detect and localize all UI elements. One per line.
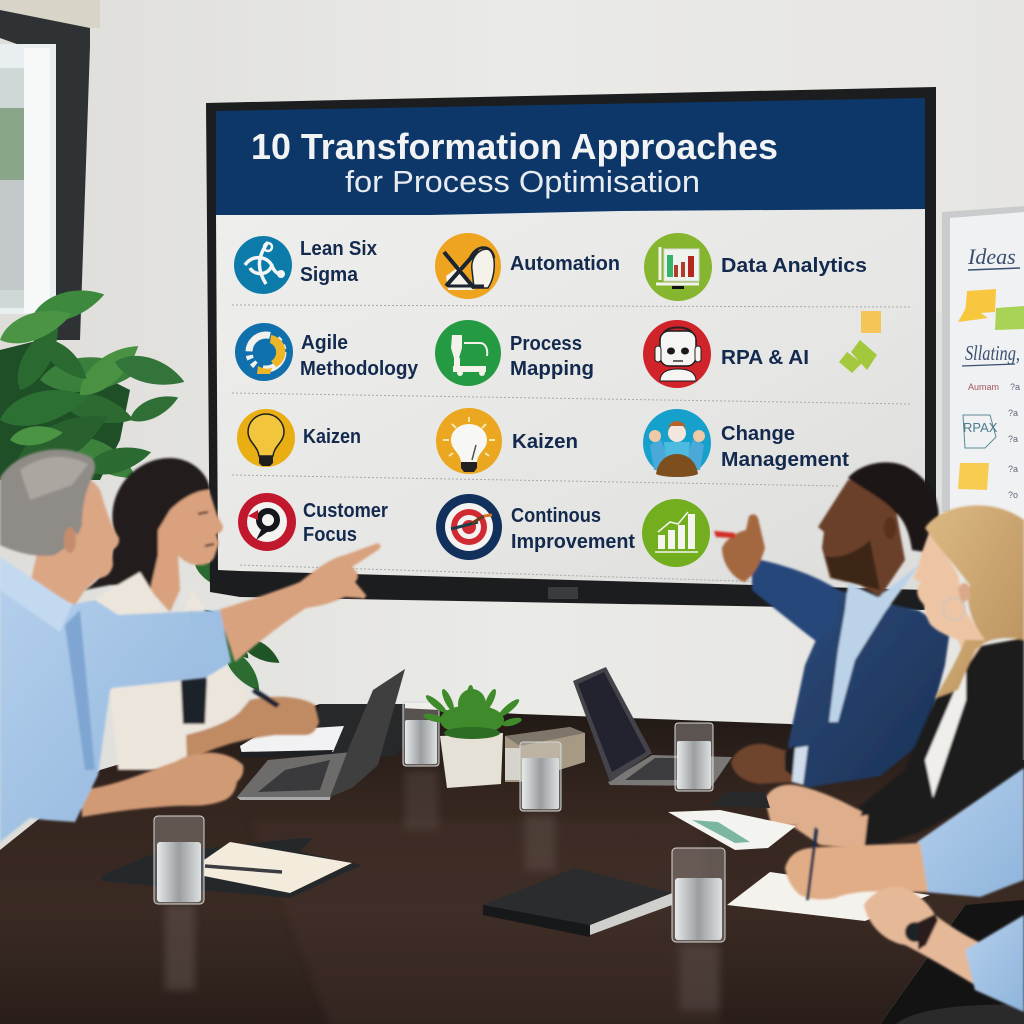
hair bbox=[925, 505, 1024, 698]
woman with dark hair bbox=[84, 458, 319, 770]
watch and cuff bbox=[785, 745, 795, 778]
tablet on table bbox=[300, 704, 405, 756]
label: process mapping: Process bbox=[510, 333, 582, 355]
hair bbox=[84, 458, 210, 590]
label: lean six sigma: Lean Six bbox=[300, 238, 377, 260]
label: continuous improvement: Continous bbox=[511, 505, 601, 527]
whiteboard: ?a bbox=[1010, 382, 1020, 392]
whiteboard: RPAX bbox=[963, 420, 998, 435]
glass front left bbox=[154, 816, 204, 904]
potted plant behind people bbox=[0, 281, 284, 696]
neck and face bbox=[30, 479, 119, 605]
white content panel bbox=[216, 208, 925, 590]
beard shade bbox=[825, 540, 880, 590]
hair bbox=[0, 449, 95, 556]
blue header band bbox=[216, 98, 925, 215]
back notepad spine bbox=[240, 750, 333, 758]
conference table bbox=[0, 704, 1024, 1024]
man with grey hair bbox=[0, 449, 380, 842]
ear bbox=[64, 527, 76, 553]
label: customer focus: Customer bbox=[303, 500, 388, 522]
icon: rpa and ai robot bbox=[643, 320, 711, 388]
whiteboard bbox=[934, 206, 1024, 520]
marker bbox=[714, 531, 735, 538]
label: lean six sigma bbox=[300, 238, 377, 286]
face and neck bbox=[913, 530, 985, 665]
icon: kaizen bulb with rays bbox=[436, 408, 502, 474]
small tablet bbox=[710, 792, 770, 808]
label: continuous improvement: Improvement bbox=[511, 531, 635, 553]
title: 10 Transformation Approaches bbox=[251, 126, 778, 167]
label: kaizen centre: Kaizen bbox=[512, 431, 578, 453]
dark top bbox=[178, 612, 207, 724]
man in navy suit bbox=[714, 462, 950, 788]
label: agile methodology: Methodology bbox=[300, 358, 419, 380]
icon: process mapping bbox=[435, 320, 501, 386]
label: process mapping: Mapping bbox=[510, 358, 594, 380]
icon: automation bbox=[435, 233, 501, 299]
beige box bbox=[505, 727, 585, 782]
whiteboard: ?a bbox=[1008, 464, 1018, 474]
wall display frame bbox=[206, 87, 936, 610]
row dividers bbox=[232, 305, 910, 582]
label: agile methodology bbox=[300, 332, 419, 380]
table reflections bbox=[165, 770, 720, 1024]
label: change management bbox=[721, 423, 849, 471]
whiteboard: ?a bbox=[1008, 408, 1018, 418]
icon: agile methodology bbox=[235, 323, 293, 381]
glass back right bbox=[675, 723, 713, 791]
label: agile methodology: Agile bbox=[301, 332, 348, 354]
label: automation: Automation bbox=[510, 253, 620, 275]
paper on table bbox=[668, 810, 796, 850]
resting hand bbox=[731, 744, 793, 784]
glass front right bbox=[672, 848, 725, 942]
back notepad bbox=[240, 726, 344, 754]
suit body bbox=[788, 590, 950, 788]
glass centre bbox=[520, 742, 561, 811]
frame bracket bbox=[548, 587, 578, 599]
cuff bbox=[190, 610, 231, 678]
person in blue shirt at right bbox=[785, 768, 1024, 1012]
label: continuous improvement bbox=[511, 505, 635, 553]
glass back left bbox=[403, 702, 439, 766]
laptop left bbox=[237, 669, 405, 800]
label: lean six sigma: Sigma bbox=[300, 264, 359, 286]
sticky notes on screen bbox=[839, 311, 881, 373]
lower arm and hand bbox=[864, 887, 1000, 985]
blonde woman bbox=[765, 505, 1024, 850]
window bbox=[0, 0, 100, 340]
raised hand bbox=[722, 514, 765, 582]
label: change management: Change bbox=[721, 423, 795, 445]
display screen bbox=[216, 98, 925, 590]
collar bbox=[0, 557, 72, 632]
arm and hands bbox=[186, 697, 319, 762]
shirt bbox=[829, 563, 921, 722]
icon: customer focus target bbox=[238, 493, 296, 551]
chart on paper bbox=[692, 820, 750, 843]
upper sleeve bbox=[917, 768, 1024, 897]
label: process mapping bbox=[510, 333, 594, 380]
face and neck bbox=[150, 490, 223, 612]
left folder with notepad bbox=[102, 838, 362, 898]
raised sleeve bbox=[752, 558, 838, 642]
spiral notebook right bbox=[727, 872, 930, 921]
whiteboard: Ideas bbox=[967, 244, 1016, 269]
lower forearm and fist bbox=[82, 753, 243, 817]
dark floor right of table bbox=[880, 900, 1024, 1024]
subtitle: for Process Optimisation bbox=[345, 164, 700, 199]
icon: growth chart bbox=[642, 499, 710, 567]
hair bbox=[848, 462, 939, 552]
lower sleeve bbox=[965, 915, 1024, 1012]
ear bbox=[884, 517, 896, 539]
neck and head bbox=[818, 480, 905, 597]
hoop earring bbox=[943, 598, 965, 620]
icon: continuous improvement bullseye bbox=[436, 494, 502, 560]
pen bbox=[806, 827, 818, 900]
blazer bbox=[92, 572, 250, 770]
icon: kaizen bulb bbox=[237, 409, 295, 467]
hands bbox=[765, 785, 862, 828]
pointing arm bbox=[218, 543, 380, 662]
black blazer bbox=[853, 638, 1024, 850]
label: change management: Management bbox=[721, 449, 849, 471]
upper arm and hand bbox=[785, 843, 928, 899]
ear bbox=[958, 583, 970, 604]
chair back bbox=[896, 1005, 1024, 1024]
white blouse bbox=[925, 664, 966, 798]
icon: lean six sigma bbox=[234, 236, 292, 294]
label: customer focus bbox=[303, 500, 388, 546]
label: rpa and ai: RPA & AI bbox=[721, 347, 809, 369]
whiteboard: ?a bbox=[1008, 434, 1018, 444]
icon: data analytics bbox=[644, 233, 712, 301]
placket shade bbox=[65, 610, 95, 770]
label: customer focus: Focus bbox=[303, 524, 357, 546]
whiteboard: ?o bbox=[1008, 490, 1018, 500]
label: data analytics: Data Analytics bbox=[721, 255, 867, 277]
black notebook bbox=[483, 868, 672, 937]
whiteboard: Aumam bbox=[968, 382, 999, 392]
eye and lips bbox=[198, 512, 214, 546]
laptop right bbox=[573, 667, 732, 786]
icon: change management people bbox=[643, 409, 711, 477]
potted table plant bbox=[422, 685, 523, 788]
watch bbox=[905, 914, 938, 950]
label: kaizen left: Kaizen bbox=[303, 426, 361, 448]
shirt body and sleeves bbox=[0, 557, 231, 842]
